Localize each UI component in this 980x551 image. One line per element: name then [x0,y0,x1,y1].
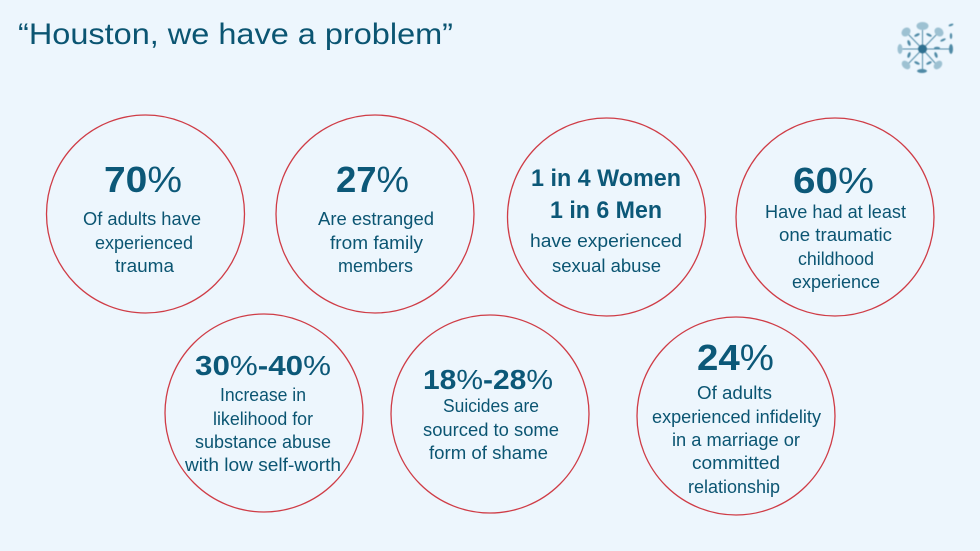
description: substance abuse: substance abuse [195,432,331,452]
description: substance abuse: with low self-worth [184,455,341,475]
description: infidelity: Of adults [697,383,772,403]
description: adults trauma [83,209,201,276]
panel: 18%-28% suicides [391,315,589,513]
description: childhood: one traumatic [779,225,892,245]
description: suicides: sourced to some [423,420,559,440]
description: infidelity: relationship [688,477,780,497]
stat: 27%: 27% [336,159,409,200]
description: infidelity: experienced infidelity [652,407,821,427]
description: substance abuse: Increase in [220,385,306,405]
description: estranged: members [338,256,413,276]
panel: 27% estranged [276,115,474,313]
description: adults trauma: experienced [95,233,193,253]
description: infidelity: in a marriage or [672,430,800,450]
description: substance abuse: likelihood for [213,409,313,429]
description: adults trauma: Of adults have [83,209,201,229]
description: childhood: Have had at least [765,202,906,222]
description: estranged: Are estranged [318,209,434,229]
panel: 30%-40% substance abuse [165,314,363,512]
stat: 30%-40%: 30%-40% [195,350,331,381]
stat: 1 in 4 Women, 1 in 6 Men [531,165,681,224]
description: sexual abuse: sexual abuse [552,256,661,276]
stat: 24%: 24% [697,337,774,378]
description: estranged [318,209,434,276]
description: suicides: Suicides are [443,396,539,416]
stat: 1 in 4 Women, 1 in 6 Men: 1 in 6 Men [550,197,662,224]
stat: 18%-28%: 18%-28% [423,364,553,395]
stat: 60%: 60% [793,160,874,201]
stat: 70%: 70% [104,159,182,200]
description: suicides [423,396,559,463]
stat: 1 in 4 Women, 1 in 6 Men: 1 in 4 Women [531,165,681,192]
description: estranged: from family [330,233,423,253]
description: childhood [765,202,906,292]
description: childhood: childhood [798,249,874,269]
description: adults trauma: trauma [115,256,175,276]
title: “Houston, we have a problem” [18,18,453,51]
description: childhood: experience [792,272,880,292]
description: infidelity: committed [692,453,780,473]
panel: 60% childhood trauma [736,118,934,316]
description: infidelity [652,383,821,497]
description: sexual abuse: have experienced [530,231,682,251]
panel: 70% trauma [46,115,244,313]
panel: sexual abuse [508,118,706,316]
description: sexual abuse [530,231,682,276]
description: suicides: form of shame [429,443,548,463]
icon: dandelion logo [898,22,954,73]
panel: 24% infidelity [637,317,835,515]
description: substance abuse [184,385,341,475]
